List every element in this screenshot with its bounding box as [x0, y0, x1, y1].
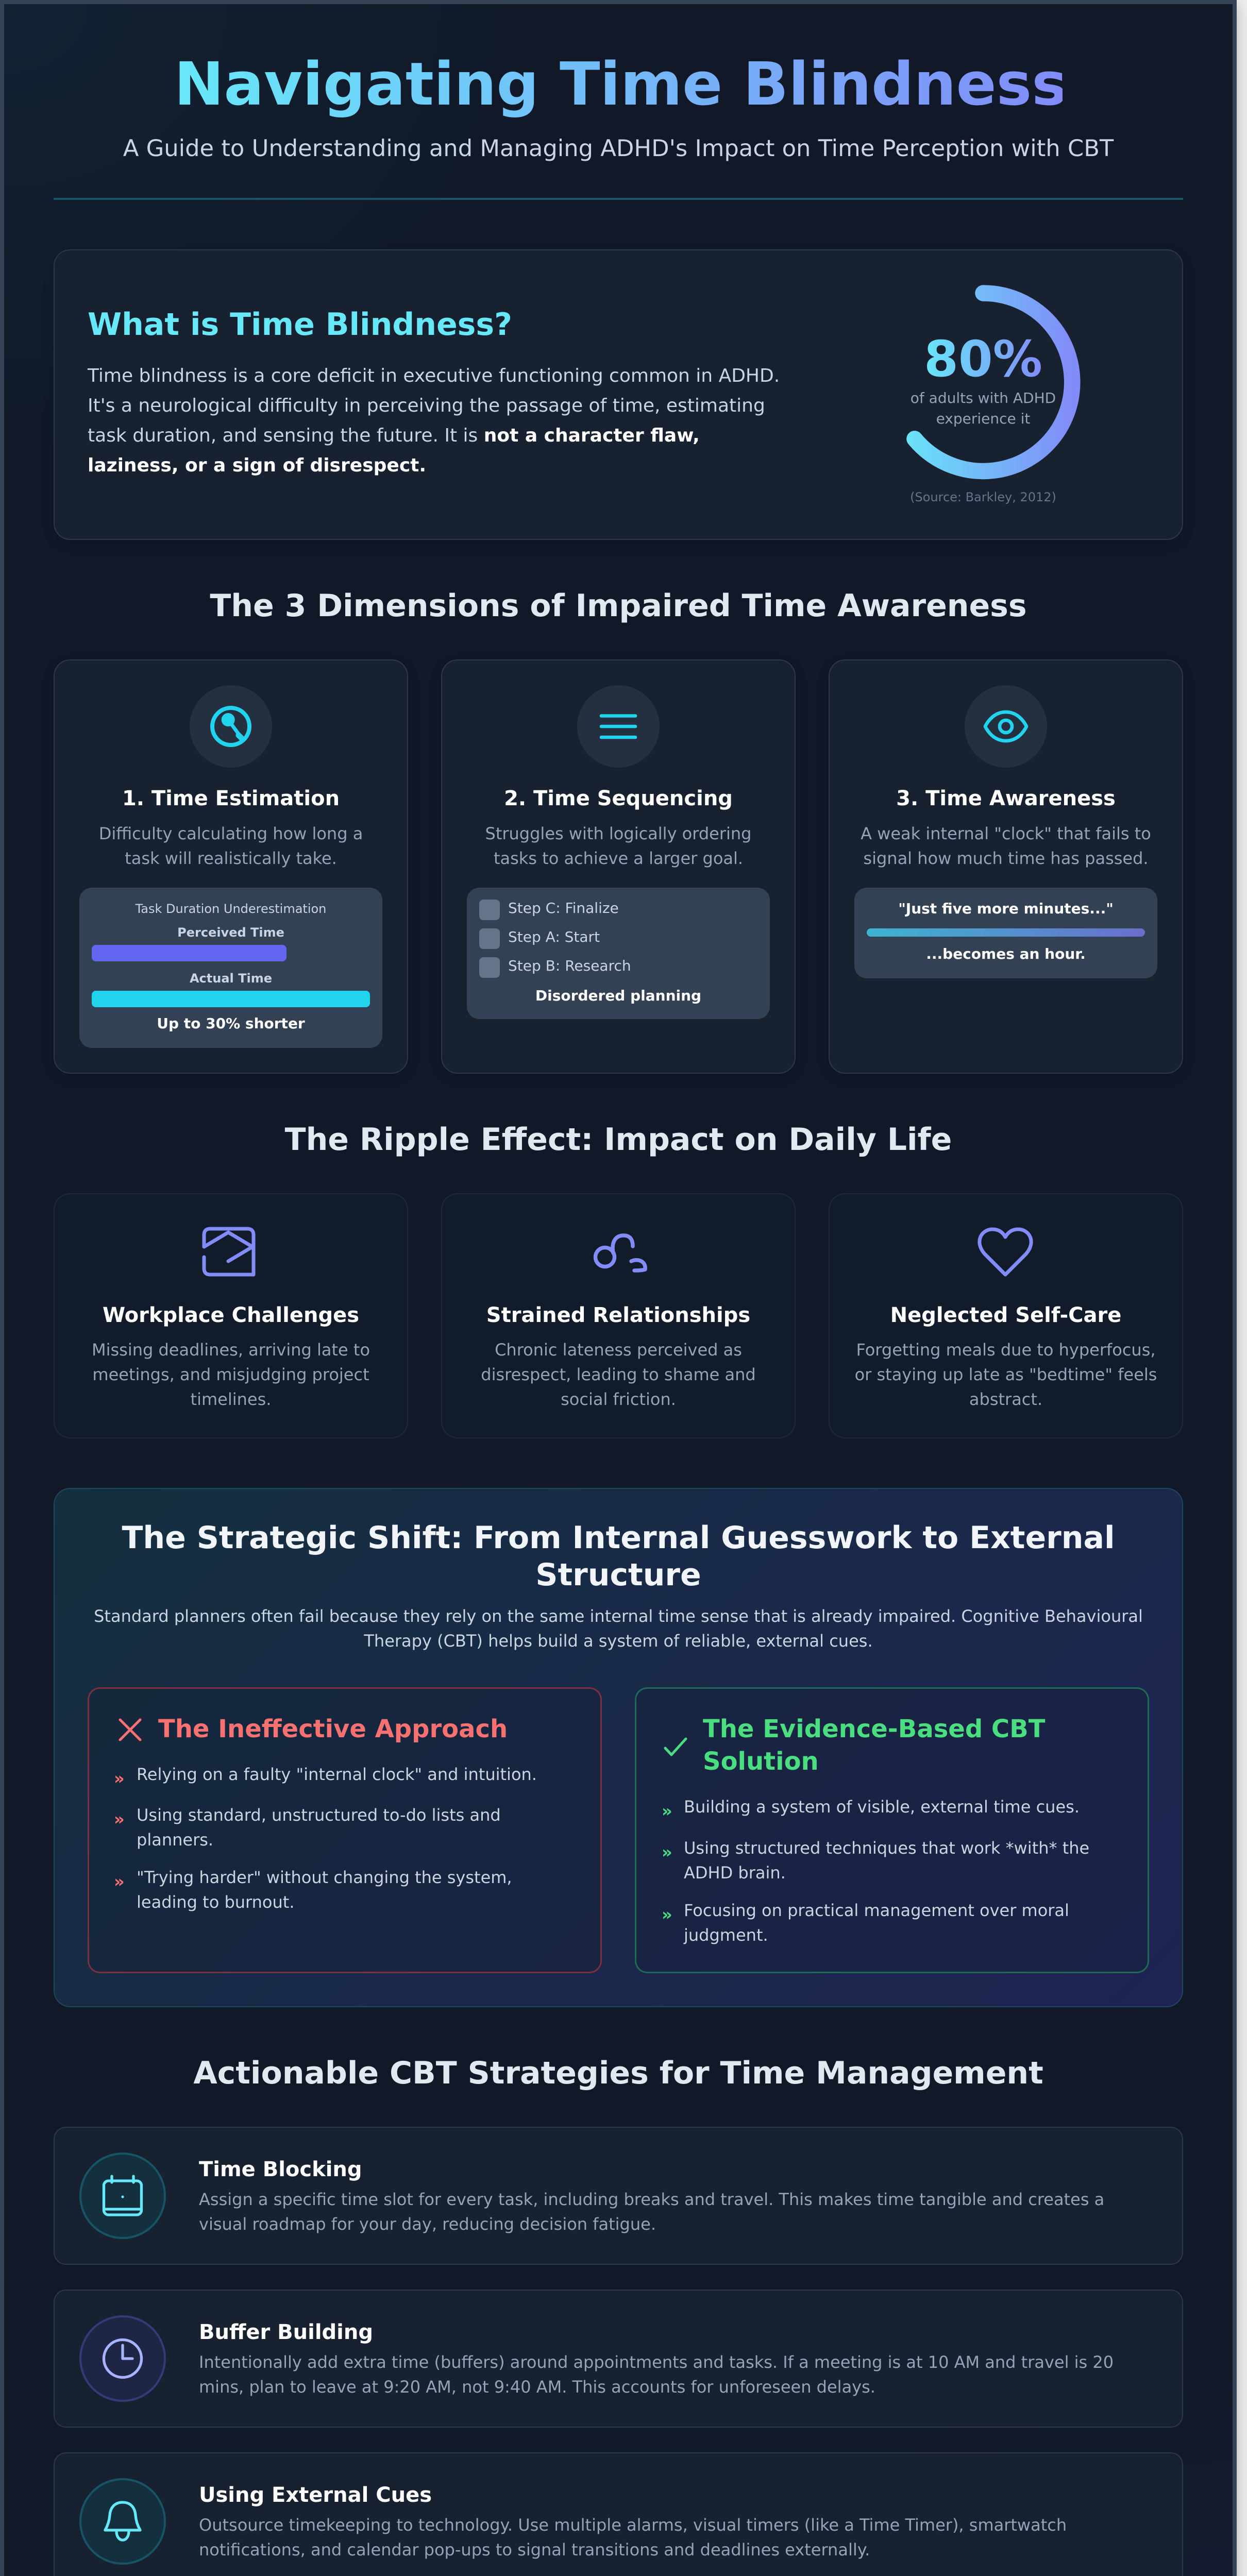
strategy description: notifications, and calendar pop-ups to signal transitions and deadlines externally. [199, 2540, 870, 2560]
text block: intro: Therapy (CBT) helps build a system of reliable, external cues. [364, 1631, 873, 1651]
panel: neglected self-care [829, 1193, 1183, 1438]
step row: A: Step A: Start [508, 928, 600, 945]
card description: or staying up late as "bedtime" feels [855, 1365, 1157, 1384]
icon: workplace [202, 1227, 256, 1277]
panel: ineffective approach [88, 1687, 602, 1973]
card description: Chronic lateness perceived as [495, 1340, 742, 1360]
subtitle: A Guide to Understanding and Managing ADHD's Impact on Time Perception with CBT [123, 134, 1114, 162]
icon: list lines [577, 685, 660, 768]
card title: Strained Relationships [486, 1303, 750, 1327]
source: (Source: Barkley, 2012) [910, 490, 1056, 504]
list item: leading to burnout. [137, 1892, 295, 1912]
text block: intro: Standard planners often fail because they rely on the same internal time sense that is already impaired. Cognitive Behavioural [94, 1606, 1143, 1626]
heading: ripple effect: The Ripple Effect: Impact on Daily Life [285, 1122, 952, 1158]
card description [861, 824, 1151, 868]
heading: strategic shift [122, 1520, 1115, 1593]
strategy description [199, 2350, 1114, 2399]
stat caption [911, 389, 1056, 427]
list item: judgment. [684, 1925, 768, 1945]
card description: social friction. [561, 1389, 676, 1409]
list: evidence-based [662, 1794, 1115, 1949]
step row: C: Step C: Finalize [508, 900, 619, 917]
chart title: Task Duration Underestimation [136, 902, 326, 916]
strategy title: Buffer Building [199, 2320, 373, 2344]
heading: strategic shift: The Strategic Shift: From Internal Guesswork to External [122, 1520, 1115, 1556]
list item: » [662, 1842, 672, 1862]
panel: buffer building [54, 2290, 1183, 2428]
icon: eye [965, 685, 1047, 768]
card description: Struggles with logically ordering [485, 824, 751, 843]
list item: ADHD brain. [684, 1863, 786, 1883]
panel: evidence-based solution [635, 1687, 1149, 1973]
strategy title: Using External Cues [199, 2483, 432, 2507]
stat caption: of adults with ADHD [911, 389, 1056, 406]
panel: time estimation [54, 659, 408, 1074]
diagram: disordered steps [467, 888, 770, 1019]
strategy description: Intentionally add extra time (buffers) around appointments and tasks. If a meeting is at 10 AM and travel is 20 [199, 2352, 1114, 2372]
panel: workplace challenges [54, 1193, 408, 1438]
list item: » [114, 1809, 125, 1829]
card description: disrespect, leading to shame and [481, 1365, 756, 1384]
icon: cross [88, 1687, 160, 1749]
list item [114, 1865, 567, 1914]
heading: actionable strategies: Actionable CBT Strategies for Time Management [193, 2055, 1043, 2091]
card description [485, 824, 751, 868]
card description: Forgetting meals due to hyperfocus, [856, 1340, 1156, 1360]
quote: "Just five more minutes..." [898, 900, 1114, 917]
gradient bar [867, 928, 1145, 937]
list item [114, 1803, 567, 1852]
subheading: Solution [703, 1747, 819, 1776]
result: ...becomes an hour. [926, 945, 1086, 962]
step row: A [479, 928, 600, 949]
bar: perceived time [92, 945, 287, 961]
list item: planners. [137, 1830, 213, 1850]
label: actual time: Actual Time [190, 971, 272, 986]
list item [114, 1762, 567, 1787]
label: perceived time: Perceived Time [177, 925, 284, 940]
card description: signal how much time has passed. [863, 849, 1149, 868]
card description: Missing deadlines, arriving late to [92, 1340, 370, 1360]
card description: task will realistically take. [125, 849, 337, 868]
list item [662, 1794, 1115, 1819]
card title: Workplace Challenges [103, 1303, 359, 1327]
list item [662, 1836, 1115, 1885]
panel: time sequencing [441, 659, 796, 1074]
bar chart: task duration underestimation [79, 888, 382, 1048]
icon: relationships [594, 1233, 647, 1273]
strategy description: visual roadmap for your day, reducing decision fatigue. [199, 2214, 656, 2234]
list item: Building a system of visible, external time cues. [684, 1797, 1080, 1817]
panel: time awareness [829, 659, 1183, 1074]
icon: clock [79, 2315, 166, 2402]
heading: what is time blindness: What is Time Blindness? [88, 307, 512, 343]
bar: actual time [92, 991, 370, 1007]
card description [92, 1340, 370, 1409]
step row: B: Step B: Research [508, 957, 631, 974]
text block: definition: laziness, or a sign of disrespect. [88, 454, 426, 476]
text block: definition: Time blindness is a core deficit in executive functioning common in ADHD. [88, 365, 780, 386]
title: Navigating Time Blindness [174, 50, 1067, 119]
stat number: 80% [924, 330, 1042, 388]
icon: check [635, 1687, 707, 1770]
list item: » [662, 1905, 672, 1924]
icon: clock key [190, 685, 272, 768]
card description: meetings, and misjudging project [92, 1365, 369, 1384]
strategy description: mins, plan to leave at 9:20 AM, not 9:40 AM. This accounts for unforeseen delays. [199, 2377, 875, 2397]
text block: intro [94, 1606, 1143, 1651]
panel: strategic shift [54, 1488, 1183, 2007]
diagram: five minutes becomes an hour [854, 888, 1157, 978]
chart: 80 percent donut [906, 285, 1080, 504]
strategy description: Assign a specific time slot for every task, including breaks and travel. This makes time tangible and creates a [199, 2190, 1104, 2209]
icon: heart [978, 1227, 1033, 1277]
strategy description: Outsource timekeeping to technology. Use multiple alarms, visual timers (like a Time Timer), smartwatch [199, 2515, 1067, 2535]
panel: external cues [54, 2452, 1183, 2576]
card description: A weak internal "clock" that fails to [861, 824, 1151, 843]
chart caption: Up to 30% shorter [157, 1015, 305, 1032]
subheading: The Evidence-Based CBT [703, 1715, 1045, 1743]
strategy description [199, 2513, 1067, 2562]
list item: "Trying harder" without changing the system, [137, 1868, 512, 1887]
card title: 3. Time Awareness [896, 787, 1116, 810]
card description [481, 1340, 756, 1409]
list item: » [662, 1801, 672, 1821]
card description: tasks to achieve a larger goal. [494, 849, 743, 868]
strategy title: Time Blocking [199, 2158, 362, 2181]
strategy description [199, 2187, 1104, 2236]
text block: definition [88, 365, 780, 476]
panel: what is time blindness [54, 249, 1183, 540]
list item: » [114, 1769, 125, 1788]
icon: bell [79, 2478, 166, 2565]
step row: C [479, 900, 619, 920]
heading: 3 dimensions: The 3 Dimensions of Impaired Time Awareness [210, 588, 1027, 624]
list: ineffective [114, 1762, 567, 1937]
list item [662, 1898, 1115, 1947]
donut ring [906, 285, 1080, 479]
card title: Neglected Self-Care [890, 1303, 1121, 1327]
diagram caption: Disordered planning [535, 987, 701, 1004]
list item: Using structured techniques that work *with* the [684, 1838, 1089, 1858]
panel: strained relationships [441, 1193, 796, 1438]
text block: definition: It's a neurological difficulty in perceiving the passage of time, estimating [88, 395, 765, 416]
list item: Relying on a faulty "internal clock" and intuition. [137, 1765, 537, 1784]
stat caption: experience it [936, 410, 1030, 427]
card description [855, 1340, 1157, 1409]
card title: 2. Time Sequencing [504, 787, 733, 810]
list item: Focusing on practical management over moral [684, 1901, 1069, 1920]
card description [99, 824, 363, 868]
card title: 1. Time Estimation [122, 787, 340, 810]
step row: B [479, 957, 631, 978]
icon: calendar [79, 2153, 166, 2239]
card description: abstract. [969, 1389, 1042, 1409]
card description: timelines. [191, 1389, 271, 1409]
card description: Difficulty calculating how long a [99, 824, 363, 843]
text block: definition: task duration, and sensing the future. It is not a character flaw, [88, 425, 700, 446]
list item: Using standard, unstructured to-do lists and [137, 1805, 501, 1825]
panel: time blocking [54, 2127, 1183, 2265]
list item: » [114, 1872, 125, 1891]
subheading [703, 1713, 1045, 1778]
heading: strategic shift: Structure [535, 1557, 701, 1593]
subheading: The Ineffective Approach [158, 1715, 508, 1743]
